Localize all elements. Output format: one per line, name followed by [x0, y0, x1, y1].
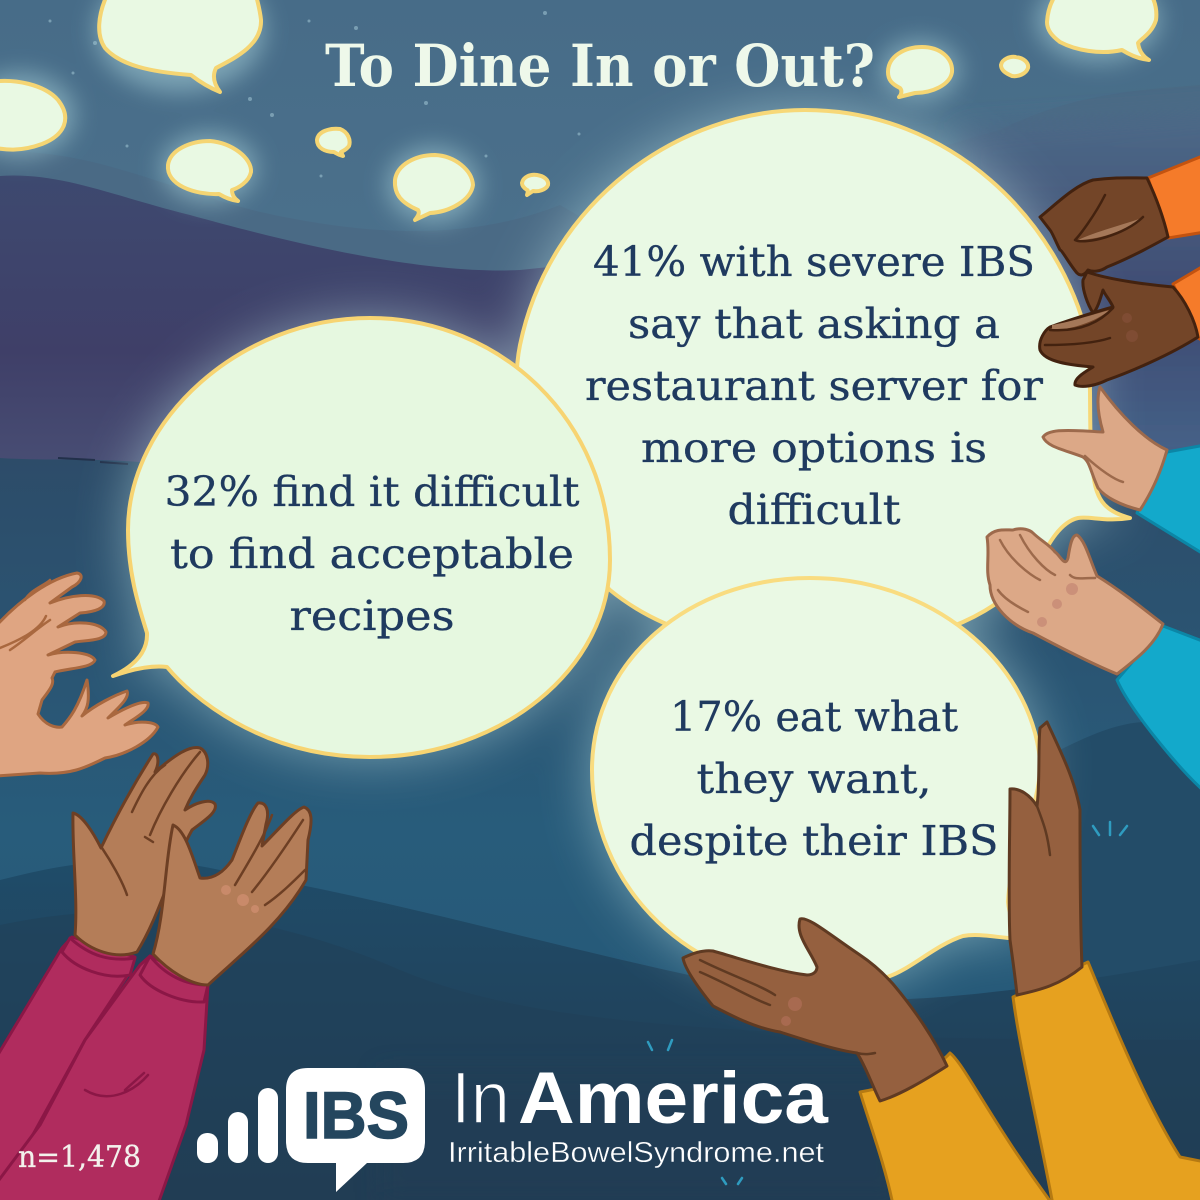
small speech bubbles	[0, 0, 1156, 220]
bubble: tiny by title	[1001, 57, 1028, 76]
text: 32% statistic: to find acceptable	[170, 530, 574, 578]
title: To Dine In or Out?	[325, 32, 875, 100]
main bubble: 41% with severe IBS	[517, 110, 1130, 650]
bubble: left edge	[0, 81, 65, 150]
hand: brown horizontal bottom	[683, 919, 947, 1101]
sleeve: yellow right	[1013, 962, 1200, 1200]
text: 41% statistic: restaurant server for	[585, 362, 1043, 410]
main bubble: 32% recipes	[113, 318, 610, 757]
bubble: top right	[1047, 0, 1156, 60]
sleeves: orange right	[1148, 155, 1200, 342]
text: 41% statistic: more options is	[641, 424, 987, 472]
sleeves: cyan right	[1117, 445, 1200, 792]
sleeve: yellow left	[860, 1053, 1053, 1200]
logo: speech bubble with IBS: IBS	[303, 1078, 409, 1152]
text: 17% statistic: they want,	[696, 755, 932, 803]
logo: IBS In America	[197, 1058, 829, 1192]
bubble: tiny	[317, 129, 350, 156]
text: 17% statistic: 17% eat what	[670, 693, 959, 741]
text: 32% statistic: recipes	[290, 592, 454, 640]
bubble: by title	[888, 47, 952, 97]
bubble: left small	[168, 141, 251, 201]
bubble: tiny right	[522, 175, 548, 195]
text: 32% statistic: 32% find it difficult	[164, 468, 580, 516]
bubble: top left large	[99, 0, 261, 92]
logo: In America wordmark: In	[451, 1058, 510, 1139]
hand: peach lower right	[987, 529, 1163, 674]
hand: peach reaching bubble right	[1043, 387, 1167, 510]
main bubble: 17% eat what they want	[592, 578, 1042, 986]
hands: lower left clapping	[73, 747, 311, 985]
hands: dark brown top right	[1040, 178, 1198, 386]
bubble: centre	[395, 155, 473, 220]
text: 17% statistic: despite their IBS	[630, 817, 998, 865]
hands: upper left peach	[0, 573, 158, 776]
text: 17% statistic	[630, 693, 998, 865]
small speech bubbles glow	[0, 0, 1160, 223]
sample size: n=1,478	[18, 1140, 141, 1175]
text: 41% statistic: difficult	[728, 486, 901, 534]
text: 41% statistic: 41% with severe IBS	[593, 238, 1035, 286]
text: 41% statistic	[585, 238, 1043, 534]
logo: In America wordmark: America	[518, 1058, 829, 1139]
text: 32% statistic	[164, 468, 580, 640]
hand: brown vertical right	[1009, 722, 1082, 995]
logo: signal bars	[197, 1088, 278, 1163]
glow behind bubbles	[113, 110, 1130, 986]
logo: speech bubble with IBS	[286, 1068, 425, 1192]
sleeve: pink sweater left	[0, 937, 208, 1200]
logo: website: IrritableBowelSyndrome.net	[448, 1137, 824, 1169]
text: 41% statistic: say that asking a	[628, 300, 1000, 348]
